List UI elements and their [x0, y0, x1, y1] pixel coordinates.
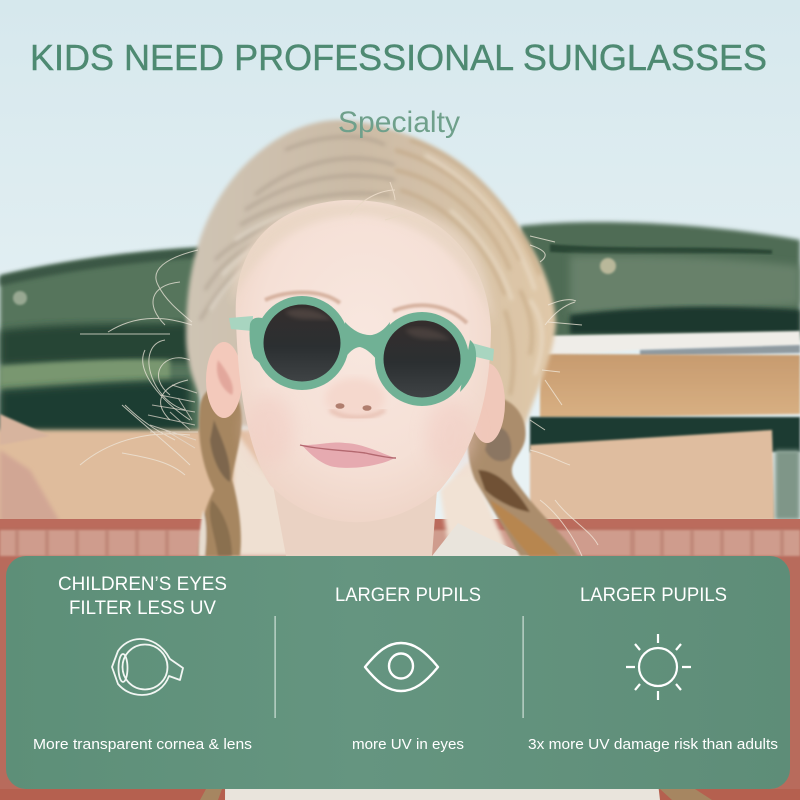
hair mass [186, 120, 556, 440]
girl portrait [80, 120, 712, 800]
railing [0, 520, 800, 800]
hairline fade [232, 203, 495, 325]
nose [325, 378, 385, 418]
sunglasses [229, 296, 494, 406]
panel: features [6, 556, 790, 789]
cheeks [246, 395, 474, 470]
stray forehead hairs [350, 182, 405, 220]
feature: larger pupils (eye) [335, 585, 481, 753]
caption: more uv: more UV in eyes [352, 737, 464, 753]
left canopy [0, 430, 270, 525]
braid ends below panel [200, 789, 712, 800]
left braid [198, 386, 242, 556]
heading: larger pupils: LARGER PUPILS [580, 585, 727, 606]
flyaway hair strands right [530, 236, 598, 556]
right tent [530, 430, 775, 520]
right braid [468, 398, 578, 556]
right awning [530, 331, 800, 356]
hair strands: warm right [395, 140, 540, 395]
frame [250, 296, 476, 406]
left lens [264, 304, 340, 382]
face [236, 200, 491, 522]
icon: eye [365, 643, 438, 691]
title: KIDS NEED PROFESSIONAL SUNGLASSES [30, 37, 767, 78]
eyebrows [265, 292, 467, 323]
ears [206, 342, 505, 443]
heading: children's eyes [58, 574, 227, 619]
feature: children's eyes [33, 574, 252, 753]
right hills [520, 222, 800, 340]
lips [300, 442, 396, 468]
shoulders and white shirt [225, 523, 660, 800]
left hills [0, 248, 200, 440]
neck [272, 480, 437, 556]
caption: cornea: More transparent cornea & lens [33, 737, 252, 753]
light fuzz beside jaw [230, 430, 300, 556]
feature: larger pupils (sun) [528, 585, 778, 753]
divider [274, 616, 276, 718]
caption: damage risk: 3x more UV damage risk than adults [528, 737, 778, 753]
icon: sun [626, 634, 691, 700]
icon: eyeball [112, 639, 183, 695]
heading: larger pupils: LARGER PUPILS [335, 585, 481, 606]
subtitle: Specialty [338, 106, 460, 139]
right lens [384, 320, 460, 398]
hair strands: dark top left [200, 137, 395, 320]
divider [522, 616, 524, 718]
heading: children's eyes: FILTER LESS UV [69, 598, 216, 619]
temples [229, 316, 253, 331]
heading: children's eyes: CHILDREN’S EYES [58, 574, 227, 595]
flyaway hair strands left [80, 250, 198, 475]
